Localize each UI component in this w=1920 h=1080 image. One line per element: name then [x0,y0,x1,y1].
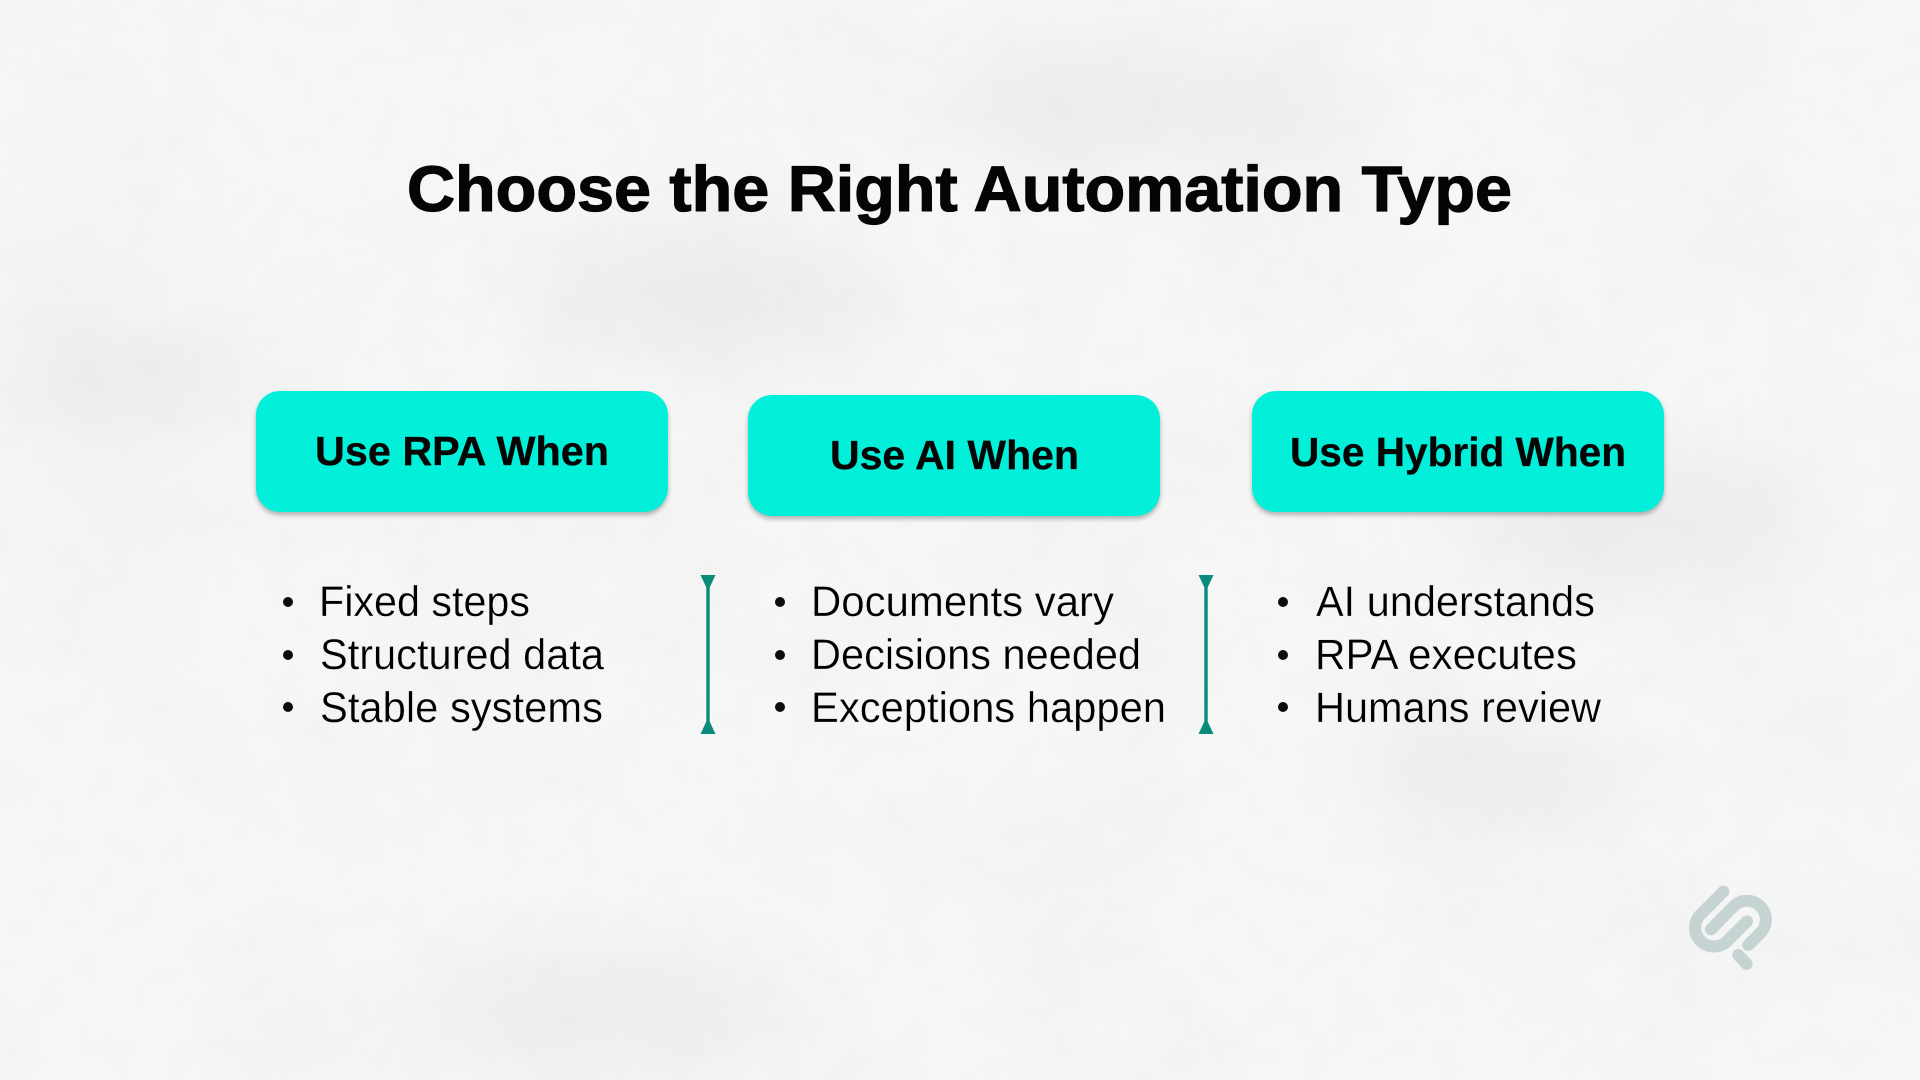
card header: Use Hybrid When [1252,391,1664,512]
heading: Use RPA When: Use RPA When [315,428,609,474]
list: RPA conditions: Structured data [320,631,604,679]
list: AI conditions: Exceptions happen [811,684,1166,732]
card header: Use RPA When [256,391,668,512]
list: AI conditions: Documents vary [811,578,1114,626]
list: RPA conditions: Fixed steps [319,578,530,626]
list: Hybrid conditions: RPA executes [1315,631,1577,679]
icon: logo [1695,892,1766,964]
heading: Use AI When: Use AI When [830,432,1079,478]
divider arrow 1 [700,575,716,734]
list: AI conditions: Decisions needed [811,631,1141,679]
list: Hybrid conditions: Humans review [1315,684,1602,732]
list: RPA conditions [283,578,604,732]
divider arrow 2 [1198,575,1214,734]
list: AI conditions [775,578,1166,732]
heading: Use Hybrid When: Use Hybrid When [1290,429,1626,475]
list: Hybrid conditions: AI understands [1316,578,1595,626]
title: Choose the Right Automation Type [407,153,1512,225]
list: RPA conditions: Stable systems [320,684,603,732]
card header: Use AI When [748,395,1160,516]
list: Hybrid conditions [1278,578,1602,732]
